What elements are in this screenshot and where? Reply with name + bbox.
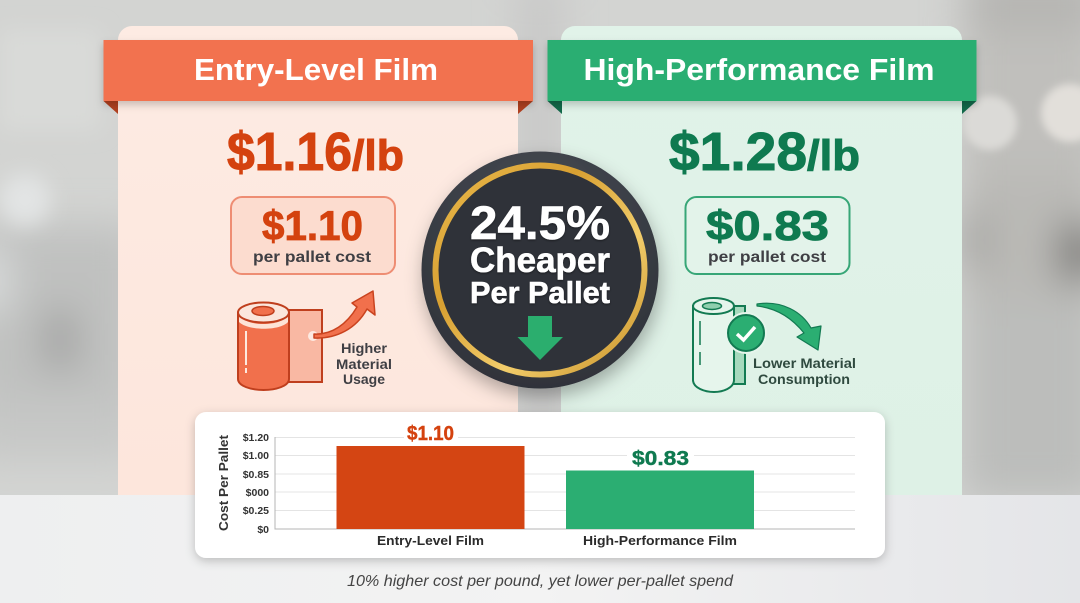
label: higher material usage: Material xyxy=(336,357,392,372)
icon: film roll with rising arrow xyxy=(238,291,375,390)
label: lower material consumption: Consumption xyxy=(758,372,850,387)
price per pound: /lb xyxy=(807,132,860,180)
per pallet cost box xyxy=(686,197,850,274)
y axis title: Cost Per Pallet xyxy=(216,434,231,531)
price per pound: /lb xyxy=(352,132,404,180)
panel: entry-level film xyxy=(104,26,533,495)
y axis labels: $0 xyxy=(257,524,269,536)
bar chart card xyxy=(195,412,885,558)
y axis labels: $000 xyxy=(246,487,269,499)
badge text: Cheaper xyxy=(470,241,610,280)
bar: entry-level film: Entry-Level Film xyxy=(377,533,484,548)
label: lower material consumption xyxy=(753,356,856,387)
y axis labels: $0.25 xyxy=(243,505,269,517)
banner: entry-level film: Entry-Level Film xyxy=(194,52,438,87)
y axis labels: $0.85 xyxy=(243,469,269,481)
bar: high-performance film: High-Performance Film xyxy=(583,533,737,548)
label: higher material usage: Usage xyxy=(343,372,385,387)
icon: down arrow xyxy=(518,316,563,360)
price per pound: $1.28 xyxy=(669,122,807,182)
icon: film roll with check and falling arrow xyxy=(693,298,821,392)
badge: 24.5% cheaper per pallet xyxy=(422,152,658,388)
label: lower material consumption: Lower Material xyxy=(753,356,856,371)
bar: high-performance film: $0.83 xyxy=(632,448,689,470)
per pallet cost box: $1.10 xyxy=(262,202,363,249)
badge text: Per Pallet xyxy=(470,275,610,310)
price per pound: $1.16 xyxy=(227,122,352,182)
badge text xyxy=(470,196,610,310)
badge text: 24.5% xyxy=(470,196,610,249)
y axis labels xyxy=(243,432,269,536)
per pallet cost box: per pallet cost xyxy=(708,249,827,266)
per pallet cost box: per pallet cost xyxy=(253,249,372,266)
bar: high-performance film xyxy=(566,448,754,548)
panel: high-performance film xyxy=(548,26,976,495)
bar: entry-level film: $1.10 xyxy=(407,423,454,445)
per pallet cost box xyxy=(231,197,395,274)
label: higher material usage: Higher xyxy=(341,341,388,356)
caption: 10% higher cost per pound, yet lower per-pallet spend xyxy=(347,573,734,590)
banner: entry-level film xyxy=(104,40,533,114)
per pallet cost box: $0.83 xyxy=(706,202,829,249)
y axis labels: $1.00 xyxy=(243,450,269,462)
banner: high-performance film xyxy=(548,40,976,114)
label: higher material usage xyxy=(336,341,392,387)
shelf surface xyxy=(0,495,1080,603)
grid lines xyxy=(275,438,855,510)
banner: high-performance film: High-Performance Film xyxy=(584,52,934,87)
bar: entry-level film xyxy=(336,423,524,548)
y axis labels: $1.20 xyxy=(243,432,269,444)
